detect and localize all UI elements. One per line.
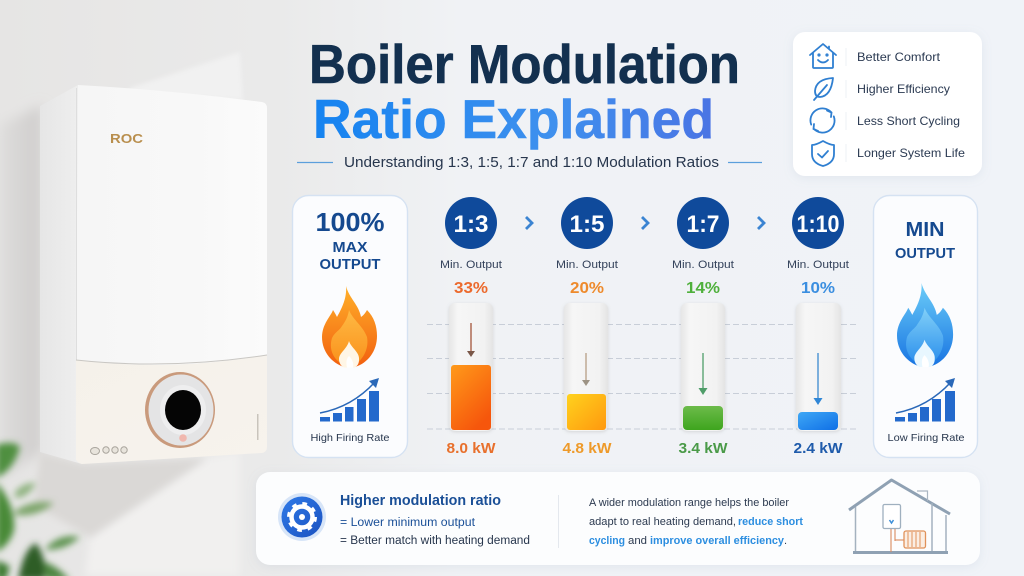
percent: 33% [454, 280, 488, 297]
arrow: chevron [526, 217, 532, 229]
explanation text: A wider modulation range helps the boiler [589, 497, 789, 509]
explanation text: improve overall efficiency [650, 535, 785, 547]
benefit: better comfort [810, 44, 941, 68]
definitions: = Lower minimum output [340, 517, 476, 529]
benefit: less short cycling [810, 108, 960, 133]
tube gauge [449, 303, 493, 431]
min output label: Min. Output [556, 259, 618, 271]
panel: summary [256, 472, 980, 565]
heading: min output [895, 219, 955, 262]
explanation text: cycling [589, 535, 625, 547]
min output label: Min. Output [672, 259, 734, 271]
ratio badge [445, 197, 497, 249]
boiler white front cover [76, 85, 267, 365]
benefit: longer system life [812, 141, 965, 166]
heading: 100% max output: 100% [316, 207, 384, 237]
icon: rising bars [320, 378, 379, 422]
column: ratio 1:7 [672, 197, 734, 457]
kW value: 4.8 kW [562, 440, 612, 457]
label: High Firing Rate [310, 432, 390, 444]
panel: max output [292, 196, 408, 458]
icon: smiling house [810, 44, 836, 68]
heading: 100% max output: OUTPUT [320, 256, 380, 273]
explanation text [589, 497, 803, 547]
explanation text: and [628, 535, 647, 547]
benefit: longer system life: Longer System Life [857, 146, 965, 160]
icon: gear [278, 493, 326, 541]
percent: 14% [686, 280, 720, 297]
kW value: 3.4 kW [678, 440, 728, 457]
heading: min output: MIN [906, 219, 944, 241]
title line 1: Boiler Modulation [309, 33, 740, 95]
label: Low Firing Rate [888, 432, 965, 444]
boiler beige lower panel [76, 355, 267, 464]
ratio badge [792, 197, 844, 249]
control dial [145, 372, 215, 448]
min output label: Min. Output [440, 259, 502, 271]
icon: orange flame [322, 286, 377, 368]
blurred plant [0, 443, 80, 576]
icon: rising bars [895, 378, 955, 422]
benefit: higher efficiency: Higher Efficiency [857, 82, 950, 96]
title line 2: Ratio Explained [313, 88, 714, 150]
tube gauge [681, 303, 725, 431]
kW value: 2.4 kW [794, 440, 843, 457]
boiler side face [40, 85, 82, 464]
definitions: = Better match with heating demand [340, 535, 530, 547]
explanation text: . [784, 535, 787, 547]
explanation text: reduce short [738, 516, 803, 528]
column: ratio 1:5 [556, 197, 618, 457]
subtitle: Understanding 1:3, 1:5, 1:7 and 1:10 Modulation Ratios [344, 155, 719, 171]
tube gauge [564, 303, 608, 431]
benefit: less short cycling: Less Short Cycling [857, 114, 960, 128]
min output label: Min. Output [787, 259, 849, 271]
front buttons [90, 447, 127, 454]
benefit: better comfort: Better Comfort [857, 50, 941, 64]
tube gauge [796, 303, 841, 431]
icon: leaf [814, 78, 833, 100]
heading: min output: OUTPUT [895, 245, 955, 262]
ratio badge: 1:7 [686, 211, 720, 238]
icon: cycle arrows [810, 108, 835, 133]
ratio badge [561, 197, 613, 249]
heading: Higher modulation ratio [340, 492, 501, 509]
percent: 10% [801, 280, 835, 297]
panel: benefits [793, 32, 982, 176]
heading: 100% max output: MAX [332, 239, 368, 256]
ROC logo: ROC [110, 132, 143, 146]
ratio badge: 1:10 [796, 211, 840, 238]
definitions [340, 517, 530, 547]
icon: house with boiler and radiator [849, 480, 950, 552]
column: ratio 1:10 [787, 197, 849, 457]
kW value: 8.0 kW [446, 440, 496, 457]
ratio badge: 1:3 [454, 211, 488, 238]
ratio badge [677, 197, 729, 249]
percent: 20% [570, 280, 604, 297]
panel: min output [874, 196, 978, 458]
ratio badge: 1:5 [570, 211, 604, 238]
arrow: chevron [758, 217, 764, 229]
heading: 100% max output [316, 207, 384, 273]
icon: shield check [812, 141, 834, 166]
title [309, 33, 740, 150]
benefit: higher efficiency [814, 78, 950, 100]
explanation text: adapt to real heating demand, [589, 516, 736, 528]
arrow: chevron [642, 217, 648, 229]
dashed guide lines [427, 324, 858, 429]
icon: blue flame [897, 283, 953, 367]
boiler unit [40, 85, 267, 464]
column: ratio 1:3 [440, 197, 502, 457]
